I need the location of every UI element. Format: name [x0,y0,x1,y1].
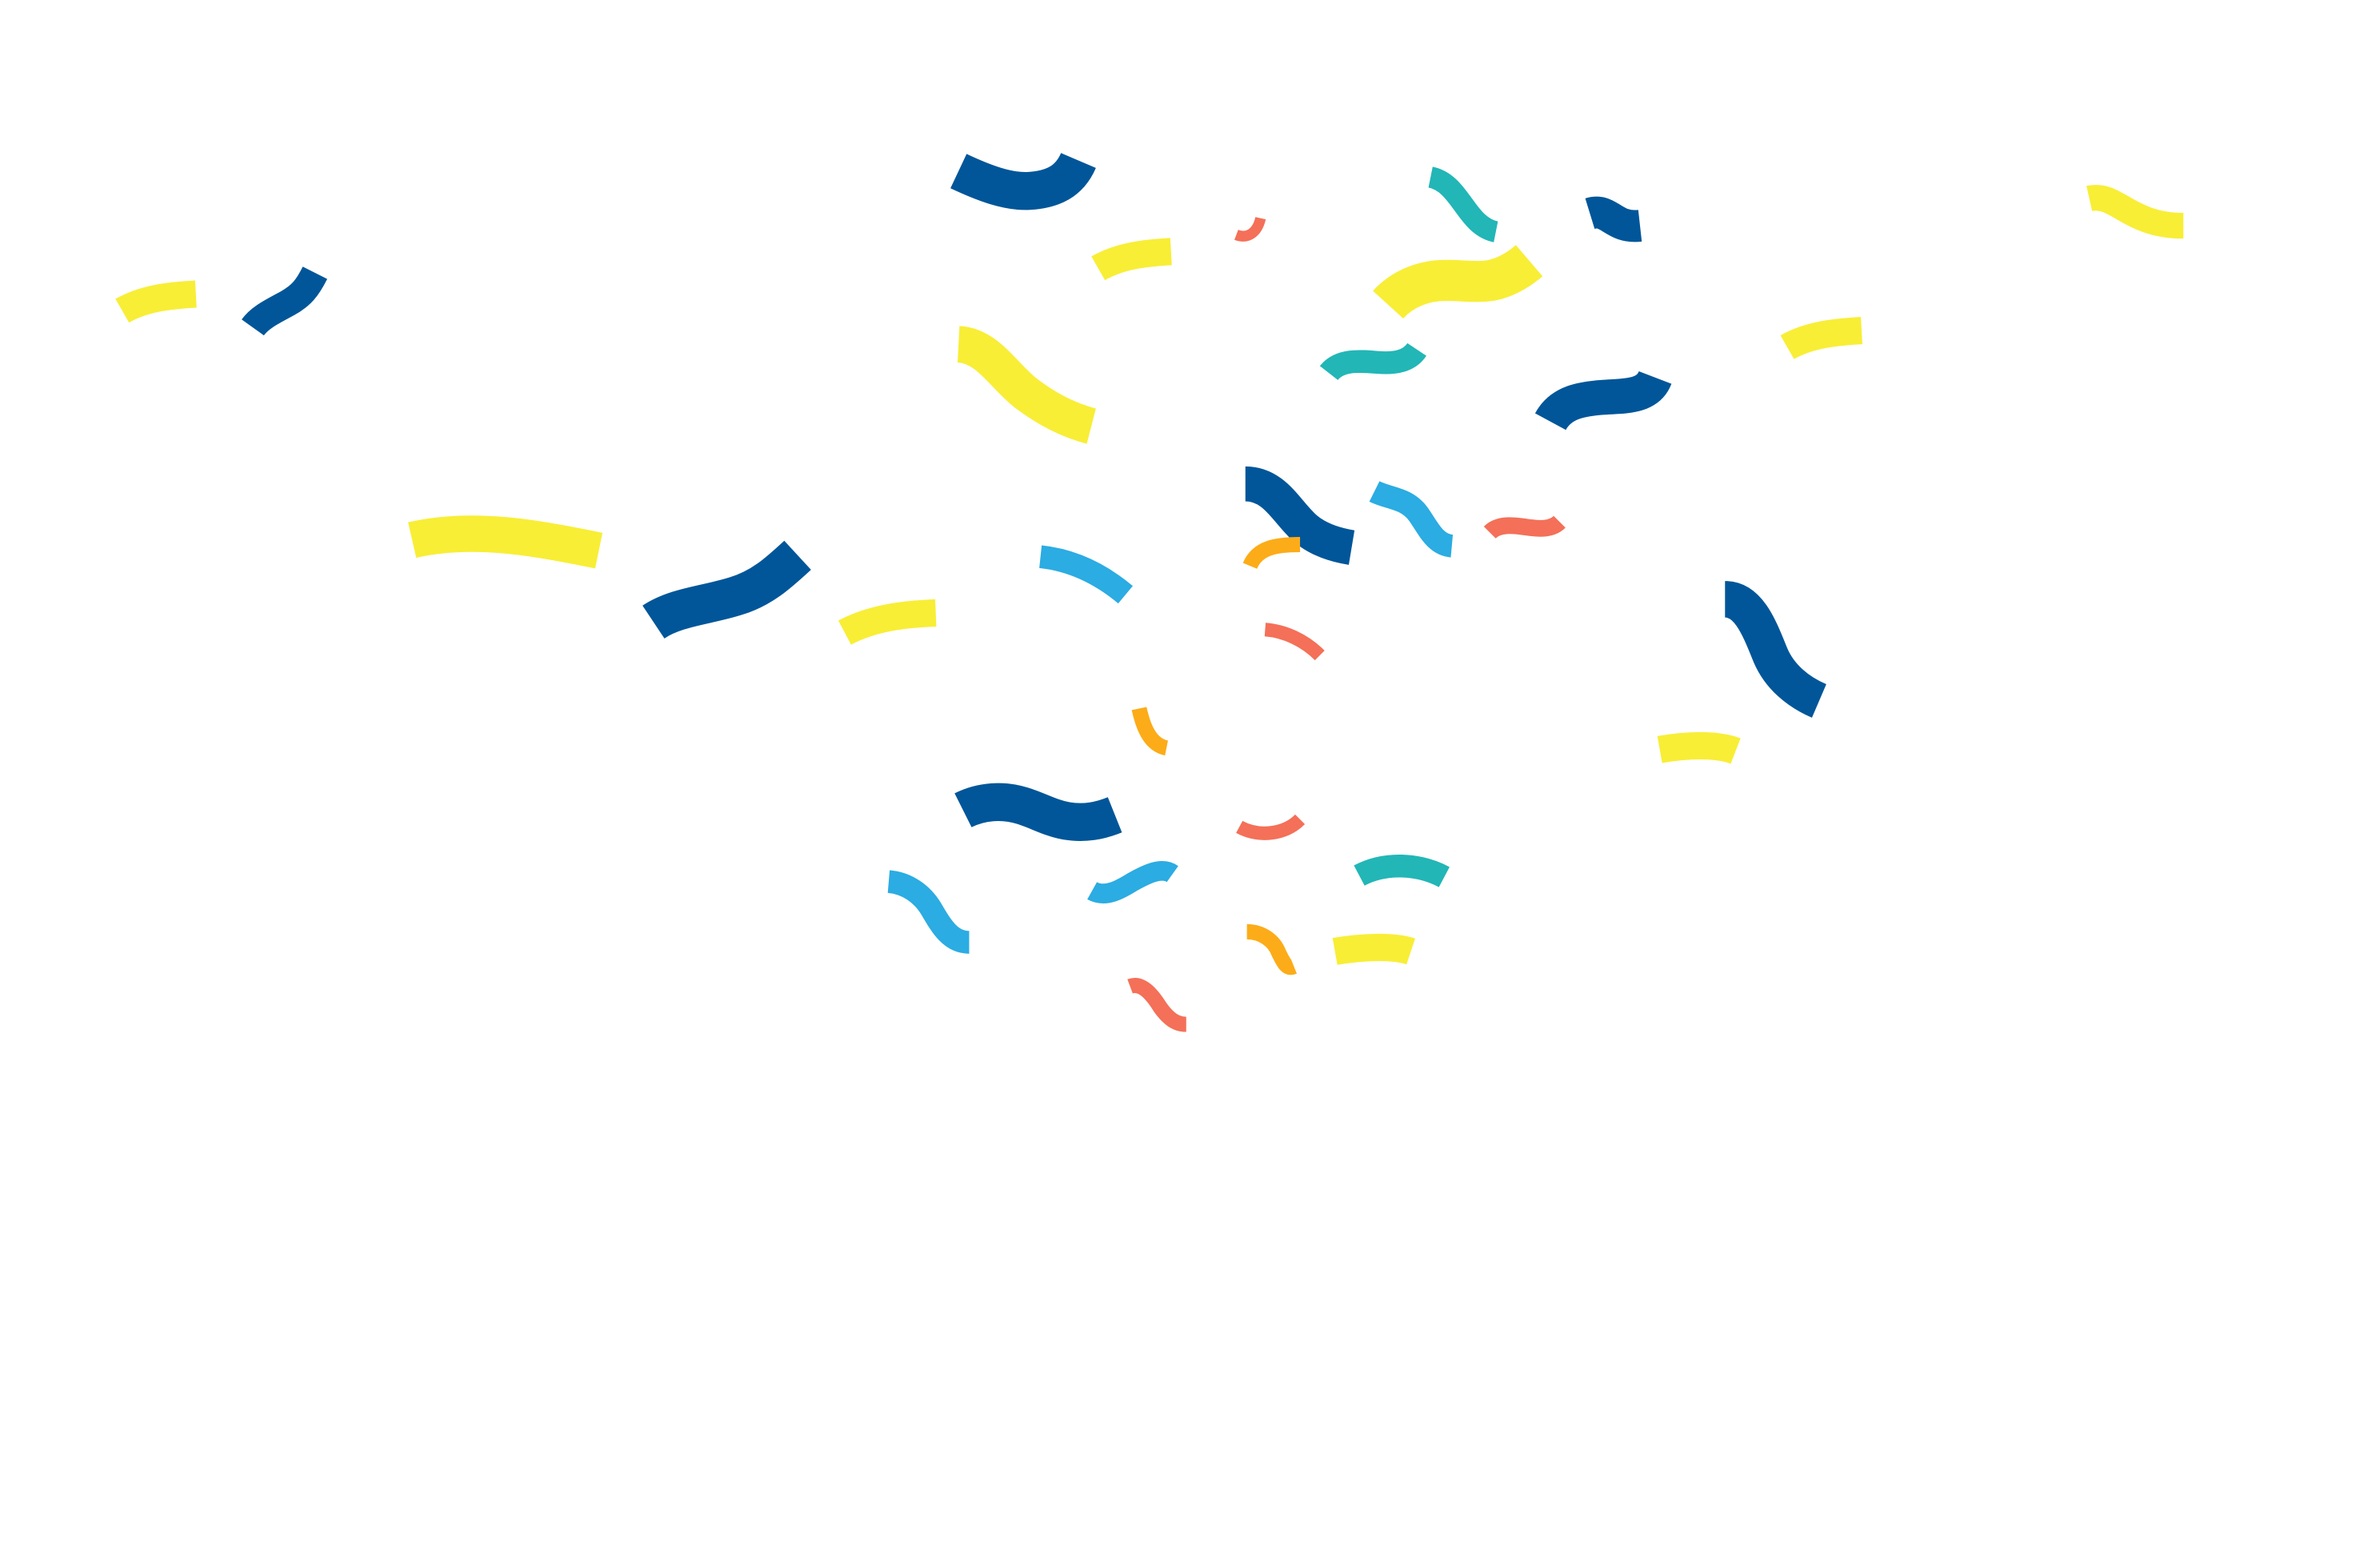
confetti: coral bottom [1130,986,1186,1024]
confetti: yellow right lower [1660,746,1736,751]
confetti: teal top [1430,177,1496,232]
confetti: navy right lower [1725,599,1819,701]
confetti: yellow large center [958,344,1091,427]
confetti: yellow far right [2090,198,2183,226]
confetti: yellow top [1098,251,1171,268]
confetti: navy wave lower [963,802,1115,822]
confetti: blue wave lower [1092,871,1173,894]
confetti: blue lower left [889,882,969,943]
confetti: orange small [1139,708,1166,748]
confetti: navy right [1550,378,1655,422]
confetti: yellow wave top [1388,261,1530,305]
confetti: yellow far left [122,294,196,310]
confetti: navy center [1246,484,1352,547]
confetti: coral tiny [1236,218,1261,236]
confetti: teal arc lower [1359,866,1444,877]
confetti: yellow lower [1335,947,1411,951]
confetti: coral smile [1239,819,1300,833]
confetti: coral arc [1265,630,1320,655]
confetti: blue center right [1374,491,1452,546]
confetti: navy top right [1590,213,1640,226]
confetti: orange lower [1247,931,1294,967]
confetti: orange arc [1250,545,1300,566]
confetti: teal wave [1329,350,1417,373]
confetti: yellow long left [412,534,599,551]
confetti: navy far left [253,273,315,327]
confetti: navy top [958,161,1078,191]
confetti: navy long left [654,555,798,622]
confetti: blue arc center [1041,557,1126,595]
confetti: yellow center left [845,613,936,633]
confetti: coral right [1490,522,1559,532]
confetti: yellow right [1787,330,1862,347]
